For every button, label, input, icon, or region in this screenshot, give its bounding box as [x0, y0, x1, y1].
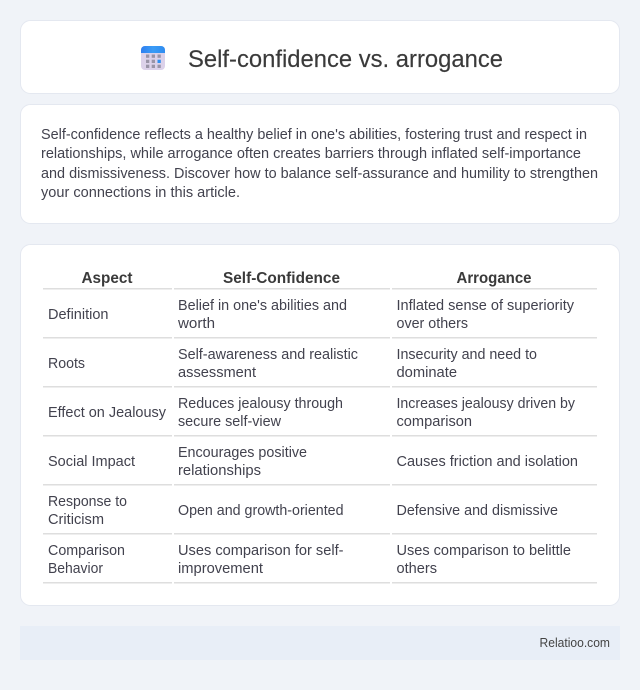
- footer text: Relatioo.com: [540, 636, 610, 650]
- table row: roots: Roots: [48, 356, 85, 372]
- table row: social impact: [48, 445, 578, 479]
- table row: comparison behavior: improvement: [178, 561, 263, 577]
- text block: introduction paragraph: [41, 127, 598, 201]
- table row: roots: Self-awareness and realistic: [178, 347, 358, 363]
- table row: response to criticism: Open and growth-oriented: [178, 503, 344, 519]
- table header: Aspect: [82, 270, 133, 287]
- table row: definition: over others: [396, 316, 468, 332]
- table row: comparison behavior: others: [396, 561, 437, 577]
- title: Self-confidence vs. arrogance: [188, 46, 503, 73]
- table row: comparison behavior: [48, 543, 571, 577]
- table row: effect on jealousy: comparison: [396, 414, 472, 430]
- table row: definition: Definition: [48, 307, 108, 323]
- table row: comparison behavior: Comparison: [48, 543, 125, 559]
- table row: social impact: Causes friction and isolation: [396, 454, 578, 470]
- table row: definition: Belief in one's abilities and: [178, 298, 347, 314]
- text block: introduction paragraph: relationships, while arrogance often creates barriers through inflated self-importance: [41, 146, 581, 162]
- text block: introduction paragraph: your connections in this article.: [41, 185, 240, 201]
- table row: comparison behavior: Uses comparison for self-: [178, 543, 344, 559]
- text block: introduction paragraph: and dismissiveness. Discover how to balance self-assurance and humility to strengthen: [41, 166, 598, 182]
- footer: [20, 626, 620, 660]
- table row: comparison behavior: Uses comparison to belittle: [396, 543, 571, 559]
- table row: response to criticism: Response to: [48, 494, 127, 510]
- table row: definition: Inflated sense of superiority: [396, 298, 575, 314]
- table row: effect on jealousy: Increases jealousy driven by: [396, 396, 576, 412]
- table row: social impact: Encourages positive: [178, 445, 307, 461]
- panel: comparison table: [20, 244, 620, 606]
- table row: roots: assessment: [178, 365, 256, 381]
- table row: response to criticism: Criticism: [48, 512, 104, 528]
- text block: introduction paragraph: Self-confidence reflects a healthy belief in one's abilities, fostering trust and respect in: [41, 127, 587, 143]
- table row: effect on jealousy: [48, 396, 576, 430]
- table row: effect on jealousy: secure self-view: [178, 414, 282, 430]
- panel: title card: [20, 20, 620, 94]
- icon: calendar: [141, 46, 165, 70]
- table row: social impact: Social Impact: [48, 454, 135, 470]
- table row: roots: dominate: [396, 365, 457, 381]
- table header: Self-Confidence: [223, 270, 340, 287]
- table row: definition: worth: [177, 316, 215, 332]
- table row: response to criticism: [48, 494, 558, 528]
- table header: Arrogance: [456, 270, 532, 287]
- table row: effect on jealousy: Reduces jealousy through: [178, 396, 343, 412]
- table row: effect on jealousy: Effect on Jealousy: [48, 405, 167, 421]
- table row: response to criticism: Defensive and dismissive: [396, 503, 558, 519]
- table row: definition: [48, 298, 575, 332]
- table row: social impact: relationships: [178, 463, 261, 479]
- table row: comparison behavior: Behavior: [48, 561, 103, 577]
- table row: roots: Insecurity and need to: [396, 347, 537, 363]
- panel: introduction: [20, 104, 620, 224]
- table header: [82, 270, 532, 287]
- table row: roots: [48, 347, 537, 381]
